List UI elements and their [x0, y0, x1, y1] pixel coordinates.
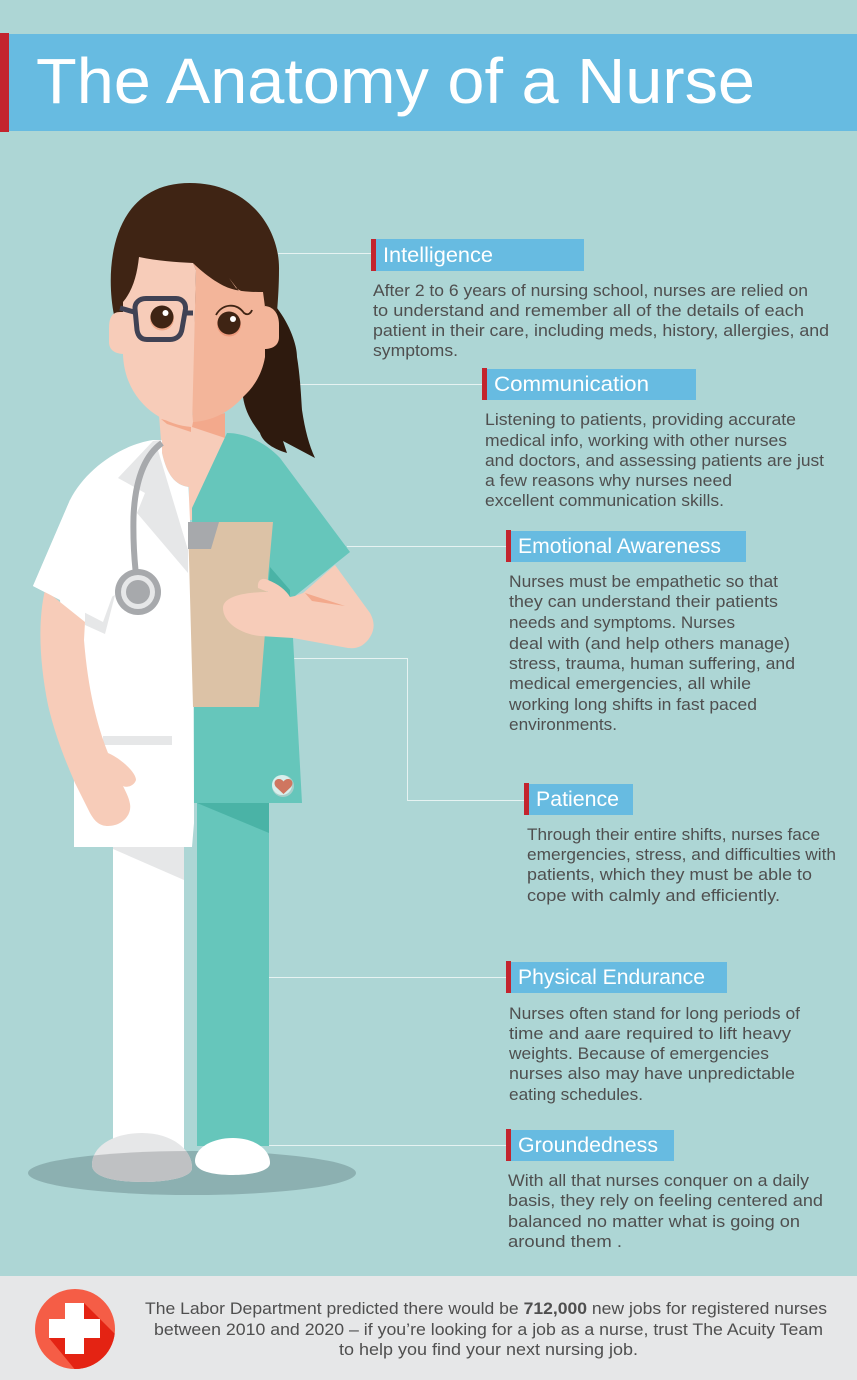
right shoe: [195, 1138, 270, 1175]
heading: intelligence: Intelligence: [383, 244, 493, 267]
text: physical endurance: [508, 1004, 800, 1104]
heading: communication: [482, 368, 696, 400]
glasses: [120, 298, 193, 340]
sleeve: [33, 500, 130, 622]
heading: physical endurance: Physical Endurance: [518, 966, 705, 989]
text: physical endurance: weights. Because of emergencies: [508, 1044, 769, 1063]
text: intelligence: patient in their care, including meds, history, allergies, and: [373, 321, 829, 340]
heading: groundedness: [506, 1129, 674, 1161]
text: groundedness: basis, they rely on feeling centered and: [508, 1191, 823, 1210]
footer text: between 2010 and 2020 – if you’re looking for a job as a nurse, trust The Acuity Team: [154, 1320, 823, 1339]
footer text: to help you find your next nursing job.: [339, 1340, 638, 1359]
text: communication: medical info, working with other nurses: [485, 431, 787, 450]
text: emotional awareness: environments.: [509, 715, 617, 734]
text: communication: and doctors, and assessing patients are just: [485, 451, 824, 470]
text: patience: patients, which they must be able to: [527, 865, 812, 884]
heading: intelligence: [371, 239, 584, 271]
title: The Anatomy of a Nurse: [36, 45, 755, 117]
footer text: [145, 1299, 827, 1359]
text: groundedness: balanced no matter what is going on: [508, 1212, 800, 1231]
heading: physical endurance: [506, 961, 727, 993]
icon: medical cross: [35, 1289, 115, 1369]
text: emotional awareness: working long shifts in fast paced: [508, 695, 757, 714]
lapel: [118, 440, 188, 573]
right arm: [223, 565, 374, 648]
text: intelligence: After 2 to 6 years of nursing school, nurses are relied on: [373, 281, 808, 300]
text: communication: Listening to patients, providing accurate: [485, 410, 796, 429]
text: groundedness: [508, 1171, 823, 1251]
section: intelligence: [371, 239, 829, 360]
left shoe: [92, 1133, 192, 1182]
heading: communication: Communication: [494, 373, 649, 396]
text: communication: excellent communication skills.: [485, 491, 724, 510]
text: patience: cope with calmly and efficiently.: [527, 886, 780, 905]
text: physical endurance: eating schedules.: [509, 1085, 643, 1104]
neck: [159, 415, 225, 520]
text: patience: emergencies, stress, and difficulties with: [527, 845, 836, 864]
text: physical endurance: nurses also may have unpredictable: [509, 1064, 795, 1083]
right eye: [216, 306, 252, 336]
heading: emotional awareness: [506, 530, 746, 562]
pocket: [103, 736, 172, 745]
text: groundedness: around them .: [508, 1232, 622, 1251]
section: groundedness: [506, 1129, 823, 1251]
heading: patience: Patience: [536, 788, 619, 811]
text: communication: [485, 410, 824, 510]
text: emotional awareness: medical emergencies, all while: [509, 674, 751, 693]
sleeve fold: [268, 567, 290, 598]
heart badge: [272, 775, 294, 797]
nurse figure: [28, 183, 374, 1195]
connector lines: [269, 254, 524, 1146]
right leg: [197, 800, 269, 1146]
section: emotional awareness: [506, 530, 795, 734]
section: patience: [524, 783, 836, 905]
text: emotional awareness: stress, trauma, human suffering, and: [509, 654, 795, 673]
footer text: The Labor Department predicted there would be 712,000 new jobs for registered nurses: [145, 1299, 827, 1318]
footer panel: [0, 1276, 857, 1380]
floor shadow: [28, 1151, 356, 1195]
arm crease: [305, 593, 345, 606]
text: patience: Through their entire shifts, nurses face: [527, 825, 820, 844]
heading: groundedness: Groundedness: [518, 1134, 658, 1157]
scrub top: [192, 433, 350, 803]
text: physical endurance: Nurses often stand for long periods of: [509, 1004, 800, 1023]
clipboard: [188, 522, 273, 707]
face: [123, 257, 265, 427]
text: intelligence: symptoms.: [373, 341, 458, 360]
title banner: [0, 33, 857, 132]
ponytail: [243, 308, 315, 458]
heading: emotional awareness: Emotional Awareness: [518, 535, 721, 558]
left arm: [40, 590, 136, 826]
sleeve shadow: [85, 595, 115, 634]
section: communication: [482, 368, 824, 510]
text: emotional awareness: deal with (and help others manage): [509, 634, 790, 653]
text: intelligence: to understand and remember all of the details of each: [373, 301, 804, 320]
neck shadow: [161, 413, 225, 438]
text: emotional awareness: needs and symptoms. Nurses: [509, 613, 735, 632]
hair: [111, 183, 279, 330]
left leg: [113, 845, 184, 1150]
left eye: [150, 306, 174, 330]
stethoscope: [115, 443, 162, 615]
text: emotional awareness: Nurses must be empathetic so that: [509, 572, 778, 591]
text: emotional awareness: they can understand their patients: [509, 592, 778, 611]
text: intelligence: [373, 281, 829, 360]
heading: patience: [524, 783, 633, 815]
text: communication: a few reasons why nurses need: [485, 471, 732, 490]
lab coat: [33, 440, 194, 847]
section: physical endurance: [506, 961, 800, 1104]
text: emotional awareness: [508, 572, 795, 734]
ears: [109, 306, 279, 354]
text: patience: [527, 825, 836, 905]
text: groundedness: With all that nurses conquer on a daily: [508, 1171, 810, 1190]
text: physical endurance: time and aare required to lift heavy: [509, 1024, 792, 1043]
